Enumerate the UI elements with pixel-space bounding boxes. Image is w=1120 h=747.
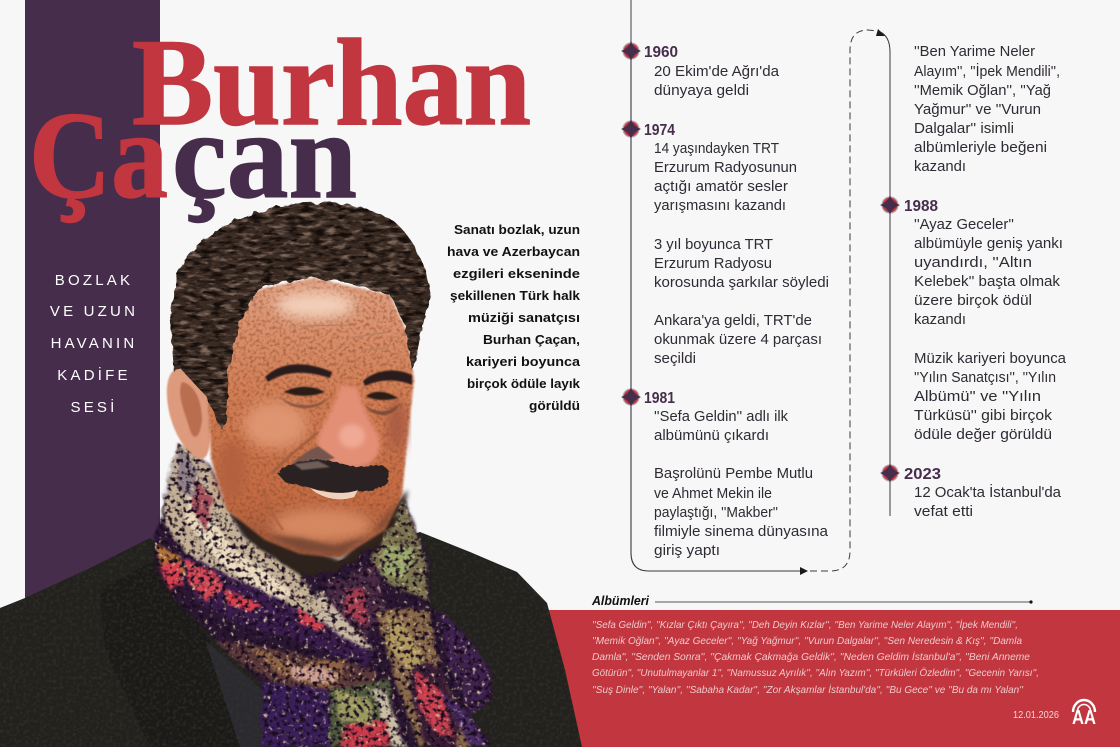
1988: Kelebek'' başta olmak [914, 274, 1061, 290]
smile lines [272, 432, 318, 474]
1988: Türküsü'' gibi birçok [914, 408, 1053, 424]
title [29, 14, 531, 224]
1960: 1960 [644, 44, 678, 61]
albums paragraph [914, 44, 1060, 175]
side slogan: SESİ [71, 398, 117, 416]
1974: Erzurum Radyosu [654, 256, 772, 272]
1988 [904, 198, 1067, 443]
1981: filmiyle sinema dünyasına [654, 524, 829, 540]
1974 [644, 122, 829, 367]
1960: 20 Ekim'de Ağrı'da [654, 64, 780, 80]
1988: Müzik kariyeri boyunca [914, 351, 1067, 367]
intro paragraph: Burhan Çaçan, [483, 332, 580, 347]
intro paragraph: şekillenen Türk halk [450, 288, 581, 303]
scarf [153, 442, 495, 747]
side slogan: HAVANIN [51, 335, 137, 352]
1974: Erzurum Radyosunun [654, 160, 797, 176]
face [208, 278, 414, 558]
right side pattern [370, 500, 428, 600]
eyebrows [265, 364, 332, 382]
2023: 2023 [904, 466, 941, 483]
1981 [644, 390, 829, 559]
1981: 1981 [644, 390, 675, 407]
side slogan: BOZLAK [55, 272, 133, 289]
1981: Başrolünü Pembe Mutlu [654, 466, 813, 482]
1974: 3 yıl boyunca TRT [654, 237, 773, 253]
albums list: Götürün'', ''Unutulmayanlar 1'', ''Namussuz Ayrılık'', ''Alın Yazım'', ''Türküleri Özledim'', ''Gecenin Yarısı'', [592, 667, 1039, 679]
2023: vefat etti [914, 504, 973, 520]
albums paragraph: Alayım'', ''İpek Mendili'', [914, 62, 1060, 80]
title: çan [172, 87, 357, 224]
2023: 12 Ocak'ta İstanbul'da [914, 483, 1062, 501]
1960 [644, 44, 780, 99]
albums heading: Albümleri [591, 594, 650, 608]
cheek tones [243, 401, 307, 449]
1974: okunmak üzere 4 parçası [654, 332, 822, 348]
albums paragraph: albümleriyle beğeni [914, 140, 1047, 156]
1974: açtığı amatör sesler [654, 179, 788, 195]
1988: 1988 [904, 198, 938, 215]
albums paragraph: ''Ben Yarime Neler [914, 44, 1035, 60]
1988: kazandı [914, 312, 966, 328]
cream band [162, 442, 335, 625]
purple band [178, 550, 375, 668]
albums paragraph: ''Memik Oğlan'', ''Yağ [914, 83, 1051, 99]
intro paragraph: görüldü [529, 398, 580, 413]
jacket [0, 532, 582, 747]
1981: albümünü çıkardı [654, 428, 769, 444]
hair [170, 202, 431, 430]
1960: dünyaya geldi [654, 83, 749, 99]
1988: ''Ayaz Geceler'' [914, 217, 1014, 233]
title: Ça [29, 87, 168, 224]
intro paragraph: Sanatı bozlak, uzun [454, 222, 580, 237]
orange band [156, 545, 285, 618]
1974: korosunda şarkılar söyledi [654, 275, 829, 291]
wrinkles [300, 325, 388, 350]
intro paragraph: kariyeri boyunca [466, 354, 581, 369]
right hanging band [375, 610, 475, 747]
albums paragraph: Dalgalar'' isimli [914, 121, 1014, 137]
timeline connector line [631, 0, 890, 575]
1988: albümüyle geniş yankı [914, 236, 1063, 252]
eyes [284, 387, 325, 396]
1974: 1974 [644, 122, 675, 139]
side slogan [50, 272, 138, 416]
shadow beside nose [284, 446, 335, 472]
icon: AA logo: AA [1072, 707, 1096, 729]
date: 12.01.2026 [1013, 710, 1059, 721]
1988: ''Yılın Sanatçısı'', ''Yılın [914, 370, 1056, 386]
1974: seçildi [654, 351, 696, 367]
albums heading [591, 594, 1033, 608]
ear [167, 368, 212, 459]
1974: 14 yaşındayken TRT [654, 141, 779, 157]
title: Burhan [132, 14, 531, 151]
moustache [278, 460, 388, 495]
1974: yarışmasını kazandı [654, 198, 786, 214]
bottom [262, 682, 330, 747]
timeline column 1 [644, 44, 829, 559]
1988: uyandırdı, ''Altın [914, 255, 1032, 271]
intro paragraph: hava ve Azerbaycan [447, 244, 580, 259]
albums list [592, 619, 1039, 696]
albums paragraph: Yağmur'' ve ''Vurun [914, 102, 1041, 118]
intro paragraph: birçok ödüle layık [467, 376, 581, 391]
1988: ödüle değer görüldü [914, 427, 1052, 443]
forehead highlight [275, 291, 355, 319]
red flowers [158, 560, 184, 590]
side slogan: VE UZUN [50, 303, 138, 320]
2023 [904, 466, 1062, 520]
side slogan: KADİFE [57, 366, 131, 384]
1981: ve Ahmet Mekin ile [654, 486, 772, 502]
icon: AA logo [1072, 700, 1096, 729]
nose [317, 385, 380, 467]
1981: ''Sefa Geldin'' adlı ilk [654, 409, 789, 425]
1988: üzere birçok ödül [914, 293, 1032, 309]
1981: giriş yaptı [654, 543, 720, 559]
mid cluster [215, 640, 375, 710]
panel: red albums band [500, 610, 1120, 747]
panel: purple side bar [25, 0, 160, 600]
portrait illustration [0, 202, 582, 747]
neck shadow [225, 490, 408, 590]
albums list: ''Memik Oğlan'', ''Ayaz Geceler'', ''Yağ Yağmur'', ''Vurun Dalgalar'', ''Sen Neredesin & Kış'', ''Damla [592, 635, 1022, 647]
timeline markers [621, 41, 900, 483]
albums list: ''Suş Dinle'', ''Yalan'', ''Sabaha Kadar'', ''Zor Akşamlar İstanbul'da'', ''Bu Gece'' ve ''Bu da mı Yalan'' [592, 684, 1024, 696]
1988: Albümü'' ve ''Yılın [914, 389, 1041, 405]
1974: Ankara'ya geldi, TRT'de [654, 313, 812, 329]
intro paragraph [447, 222, 581, 413]
timeline column 2 [904, 44, 1067, 520]
1981: paylaştığı, ''Makber'' [654, 505, 778, 521]
intro paragraph: müziği sanatçısı [468, 310, 580, 325]
albums list: ''Sefa Geldin'', ''Kızlar Çıktı Çayıra'', ''Deh Deyin Kızlar'', ''Ben Yarime Neler Alayım'', ''İpek Mendili'', [592, 619, 1018, 631]
albums list: Damla'', ''Senden Sonra'', ''Çakmak Çakmağa Geldik'', ''Neden Geldim İstanbul'a'', ''Beni Anneme [592, 651, 1030, 663]
intro paragraph: ezgileri ekseninde [453, 266, 580, 281]
albums paragraph: kazandı [914, 159, 966, 175]
